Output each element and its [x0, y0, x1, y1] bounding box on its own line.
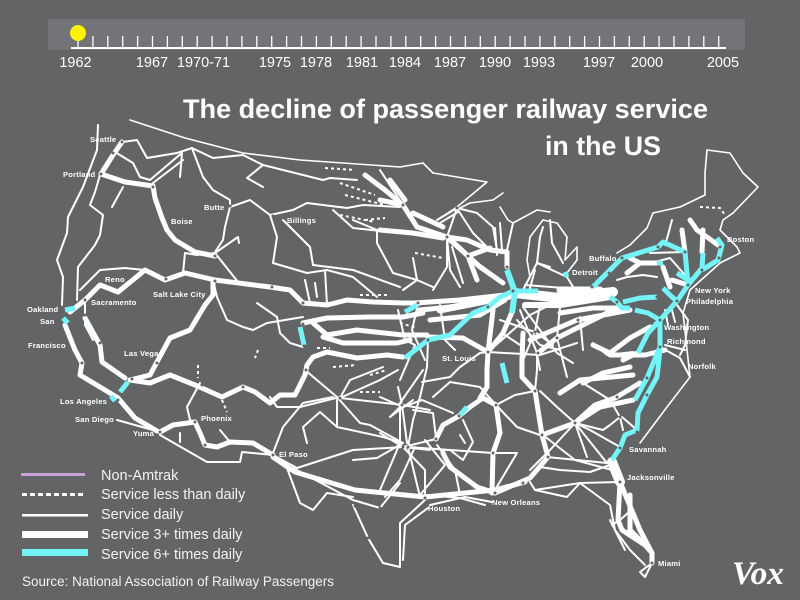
timeline year labels: 1997	[583, 55, 615, 71]
city labels: Boston	[727, 235, 755, 244]
timeline year labels: 2000	[631, 55, 663, 71]
legend: service 3+ times daily	[22, 527, 243, 543]
city labels: Salt Lake City	[153, 290, 206, 299]
city labels: El Paso	[279, 450, 308, 459]
city labels: St. Louis	[442, 354, 476, 363]
3+ times daily service routes	[65, 142, 718, 563]
legend: service 6+ times daily	[22, 547, 243, 563]
city labels: Portland	[63, 170, 96, 179]
city labels: San	[40, 317, 55, 326]
national border outline	[130, 120, 758, 443]
Vox logo: Vox	[732, 556, 784, 592]
city labels: Reno	[105, 275, 125, 284]
city labels: New York	[695, 286, 731, 295]
city labels: Billings	[287, 216, 316, 225]
timeline year labels: 1993	[523, 55, 555, 71]
title: in the US	[545, 131, 661, 161]
city labels: Richmond	[667, 337, 706, 346]
dense trunk corridors	[440, 290, 640, 540]
city labels: Washington	[664, 323, 709, 332]
timeline year labels: 1987	[434, 55, 466, 71]
legend: service 3+ times daily: Service 3+ times daily	[101, 527, 243, 543]
legend: service daily: Service daily	[101, 507, 184, 523]
legend: service less than daily: Service less than daily	[101, 487, 246, 503]
city labels: Yuma	[133, 429, 155, 438]
legend: service 6+ times daily: Service 6+ times daily	[101, 547, 243, 563]
timeline marker	[70, 25, 86, 41]
legend: non-Amtrak: Non-Amtrak	[101, 468, 179, 484]
timeline year labels: 1981	[346, 55, 378, 71]
city labels: Butte	[204, 203, 224, 212]
map of US rail network	[27, 120, 758, 577]
city labels: Philadelphia	[686, 297, 734, 306]
city labels: Las Vegas	[124, 349, 163, 358]
timeline year labels: 1984	[389, 55, 421, 71]
legend	[21, 468, 246, 563]
legend: non-Amtrak	[21, 468, 179, 484]
city labels: Norfolk	[688, 362, 717, 371]
city labels	[27, 135, 755, 568]
6+ times daily service routes	[63, 238, 722, 460]
city labels: Phoenix	[201, 414, 233, 423]
timeline year labels	[59, 55, 739, 71]
timeline year labels: 1967	[136, 55, 168, 71]
daily service routes	[57, 125, 690, 577]
title	[183, 94, 708, 161]
title: The decline of passenger railway service	[183, 94, 708, 124]
city labels: Detroit	[572, 268, 598, 277]
city labels: Savannah	[629, 445, 667, 454]
source note: Source: National Association of Railway Passengers	[22, 574, 334, 589]
city labels: Seattle	[90, 135, 116, 144]
city labels: New Orleans	[492, 498, 540, 507]
city labels: Francisco	[28, 341, 66, 350]
city labels: Los Angeles	[60, 397, 107, 406]
city labels: Oakland	[27, 305, 59, 314]
timeline year labels: 1962	[59, 55, 92, 71]
city labels: Boise	[171, 217, 193, 226]
timeline year labels: 1978	[300, 55, 332, 71]
city labels: Houston	[428, 504, 460, 513]
less than daily service	[198, 168, 725, 412]
timeline year labels: 1975	[259, 55, 291, 71]
city labels: San Diego	[75, 415, 114, 424]
station dots	[80, 140, 722, 564]
timeline	[48, 19, 745, 71]
city labels: Miami	[658, 559, 681, 568]
city labels: Buffalo	[589, 254, 617, 263]
timeline year labels: 1990	[479, 55, 511, 71]
timeline year labels: 2005	[707, 55, 739, 71]
city labels: Jacksonville	[627, 473, 675, 482]
timeline year labels: 1970-71	[177, 55, 230, 71]
city labels: Sacramento	[91, 298, 137, 307]
